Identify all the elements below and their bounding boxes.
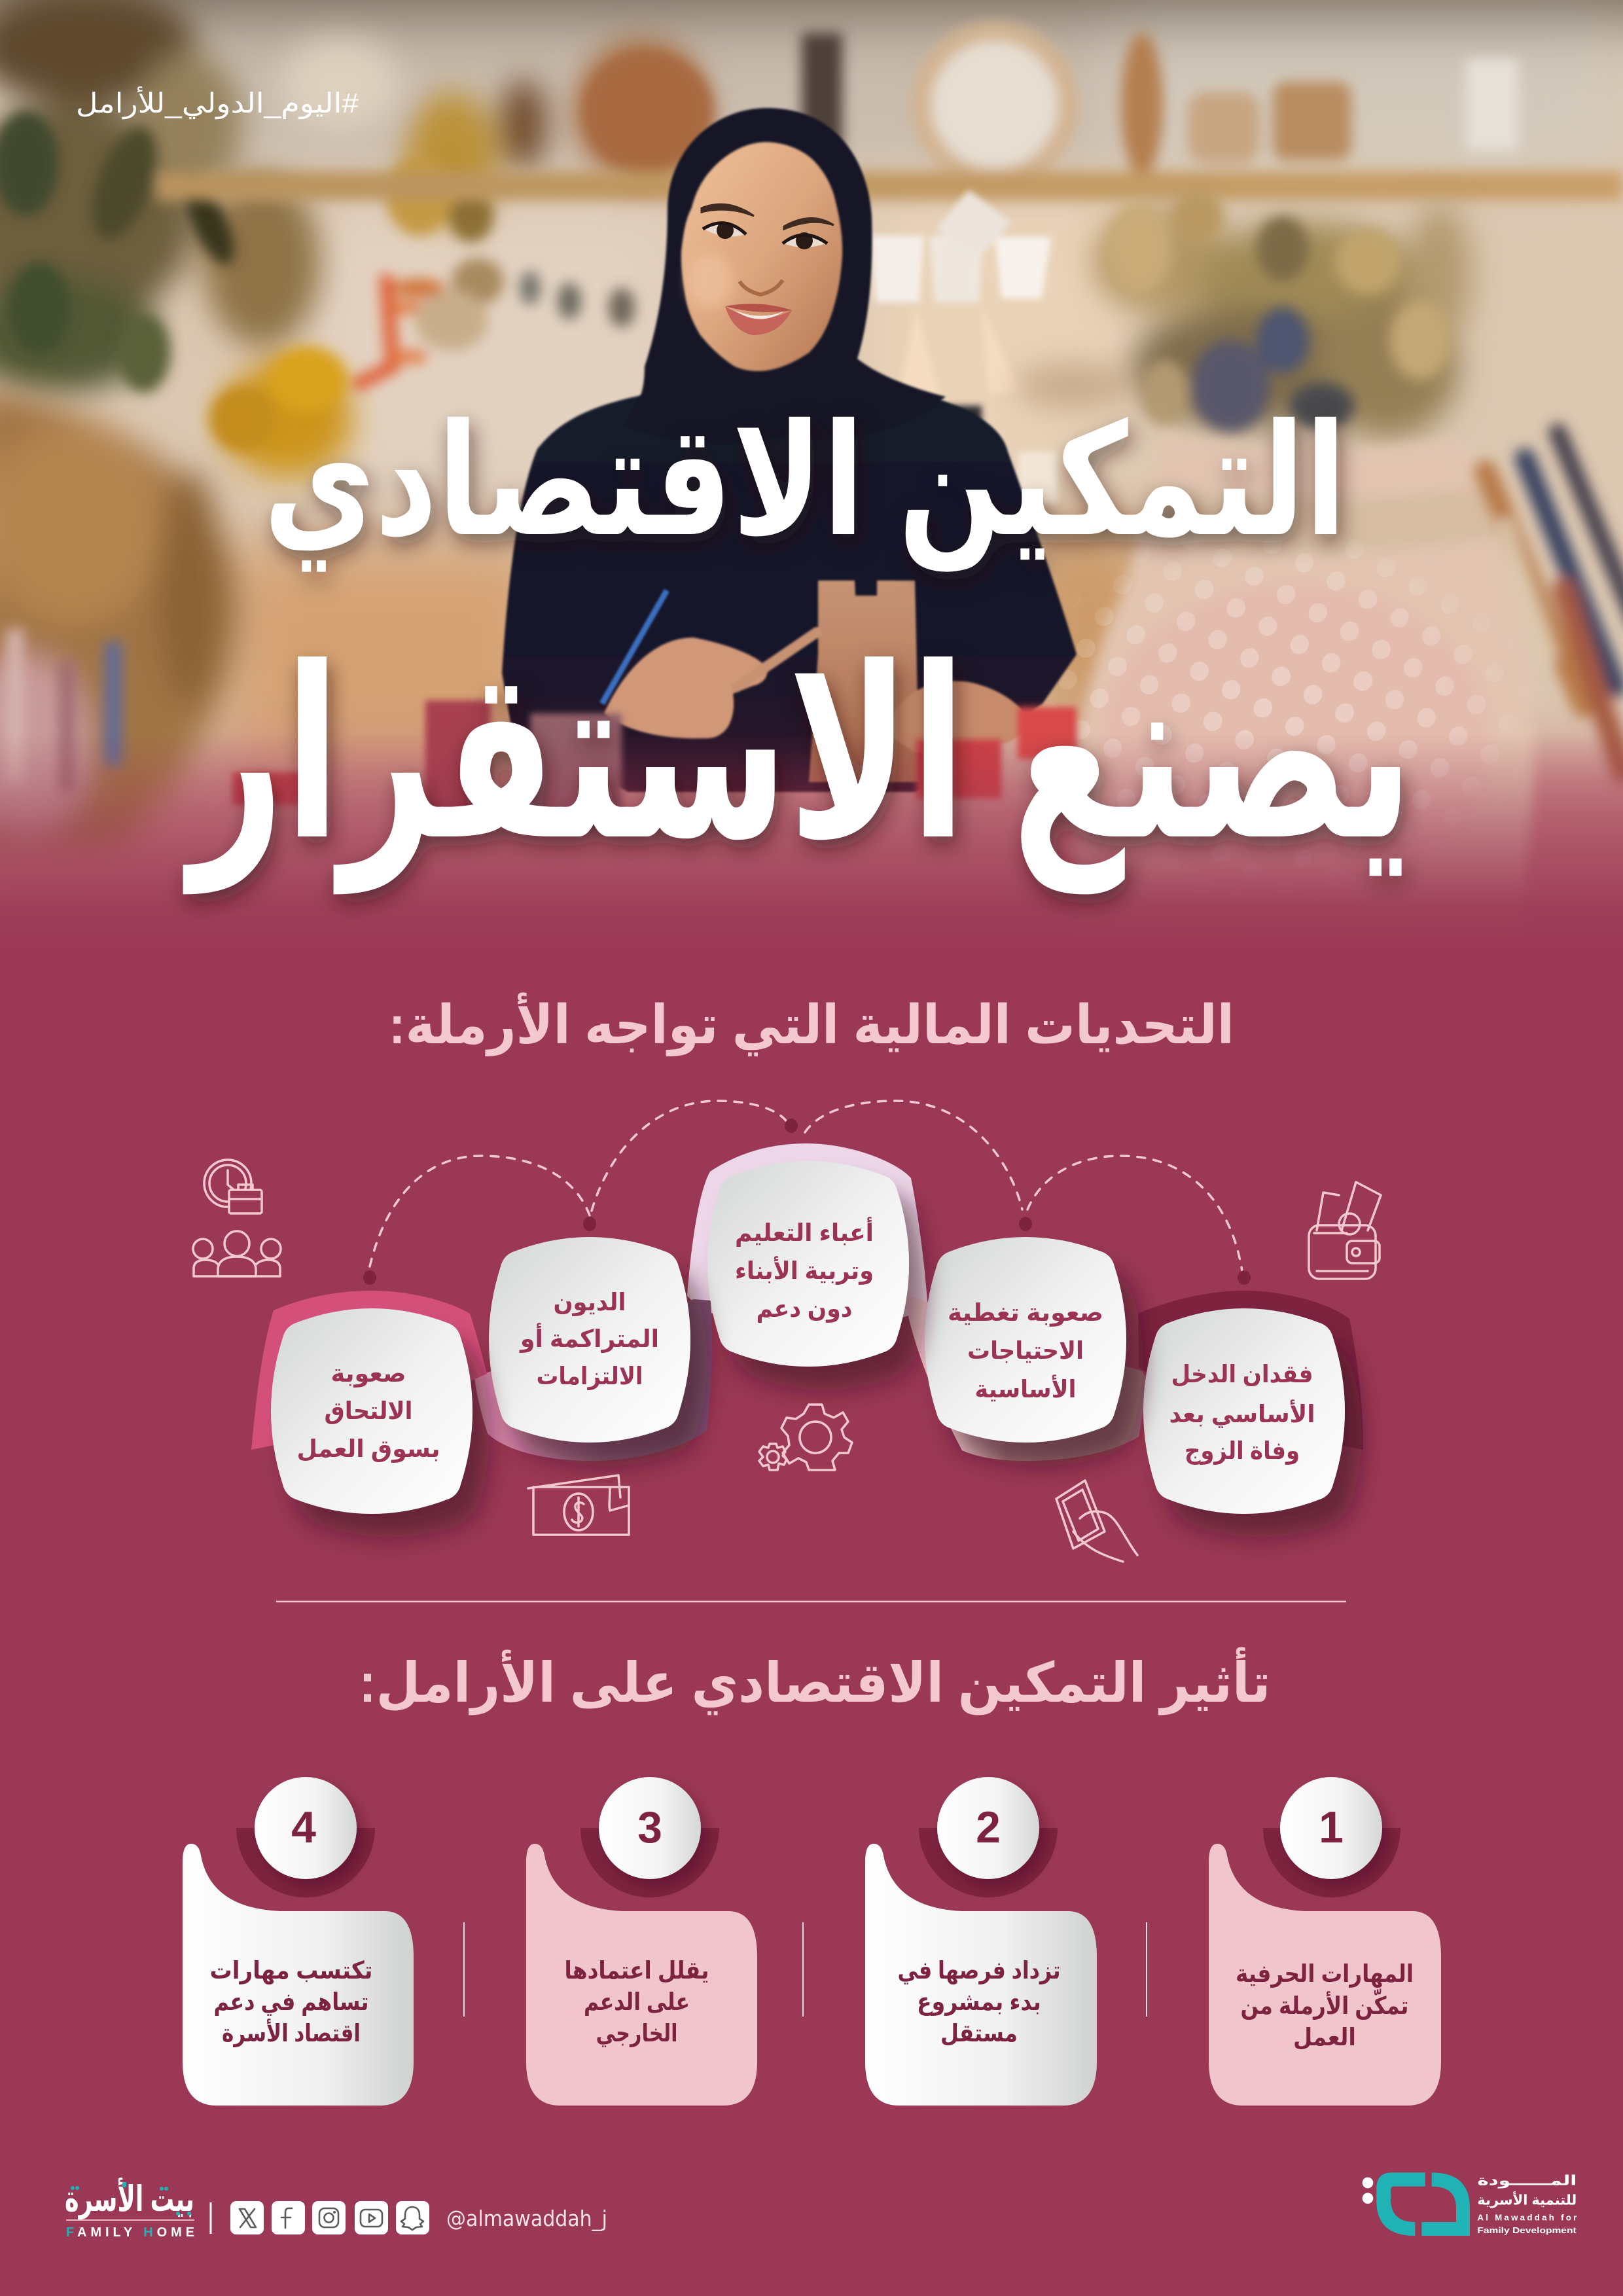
- impact card 1: [1209, 1777, 1441, 2106]
- ceramic vase right with halftone: [1074, 432, 1534, 949]
- challenges flow: [251, 1101, 1363, 1514]
- impact card 1: المهارات الحرفية: [1236, 1960, 1414, 1988]
- impact card 2: [865, 1777, 1097, 2106]
- logo wordmark: للتنمية الأسرية: [1477, 2191, 1577, 2208]
- abaya: [502, 393, 1077, 792]
- heading: impact of economic empowerment: تأثير التمكين الاقتصادي على الأرامل:: [359, 1647, 1271, 1715]
- card body 3: [526, 1844, 757, 2106]
- card: basic income loss: الأساسي بعد: [1169, 1399, 1315, 1428]
- card body 1: [1209, 1844, 1441, 2106]
- card: basic income loss: وفاة الزوج: [1185, 1437, 1300, 1465]
- woman: [232, 108, 1077, 831]
- impact card 4: تساهم في دعم: [213, 1988, 369, 2016]
- logo: al mawaddah: [1363, 2172, 1577, 2236]
- logo wordmark: Family Development: [1477, 2225, 1577, 2235]
- logo wordmark: Al Mawaddah for: [1477, 2212, 1577, 2222]
- foreground vase left: [0, 386, 240, 851]
- logo wordmark: [1477, 2173, 1577, 2235]
- card: basic needs: صعوبة تغطية: [948, 1299, 1103, 1327]
- number badge 4: 4: [291, 1803, 316, 1852]
- hands, tower and brush: [602, 581, 1034, 782]
- card: job market access: صعوبة: [331, 1360, 406, 1388]
- impact card 1: العمل: [1293, 2024, 1356, 2051]
- impact card 2: تزداد فرصها في: [898, 1957, 1060, 1984]
- impact card 2: مستقل: [940, 2020, 1018, 2047]
- icon: banknote envelope: [528, 1475, 629, 1535]
- card: basic income loss: [1143, 1308, 1345, 1514]
- number badge 4: [236, 1777, 375, 1897]
- impact card 4: [183, 1777, 414, 2106]
- card: job market access: [271, 1308, 473, 1514]
- number badge 1: 1: [1319, 1803, 1344, 1852]
- card: job market access: الالتحاق: [325, 1397, 412, 1424]
- social icon: facebook: [272, 2201, 305, 2234]
- blurred studio backdrop: [0, 0, 1623, 982]
- social icon: youtube: [355, 2201, 388, 2234]
- fade into maroon: [0, 733, 1623, 949]
- card: education burden: دون دعم: [757, 1295, 852, 1323]
- number badge 1: [1263, 1777, 1400, 1897]
- plants left: [0, 0, 707, 478]
- hijab: [625, 108, 946, 443]
- hashtag: #اليوم_الدولي_للأرامل: [76, 86, 359, 120]
- connector dots: [363, 1119, 1251, 1285]
- social icon: snapchat: [396, 2201, 429, 2234]
- card: basic needs: الاحتياجات: [967, 1337, 1084, 1364]
- social icon: x: [230, 2201, 264, 2234]
- impact card 3: يقلل اعتمادها: [564, 1957, 709, 1984]
- logo: family home: [65, 2178, 194, 2240]
- card: education burden: أعباء التعليم: [735, 1217, 874, 1247]
- logo wordmark: المــــــودة: [1477, 2173, 1577, 2189]
- logo: family home: بيت الأسرة: [65, 2178, 194, 2219]
- card body 2: [865, 1844, 1097, 2106]
- face: [681, 142, 842, 371]
- heading: financial challenges: التحديات المالية التي تواجه الأرملة:: [389, 992, 1234, 1056]
- plants right: [1014, 203, 1472, 439]
- paint jars: [232, 700, 1077, 831]
- wall decor and shelf: [157, 31, 1623, 200]
- main title: [182, 395, 1414, 895]
- ribbon behind cards: [251, 1143, 1363, 1461]
- logo mark: [1363, 2172, 1470, 2236]
- card: basic needs: [925, 1237, 1126, 1443]
- social handle: @almawaddah_j: [446, 2206, 607, 2231]
- icon: wallet with banknotes: [1309, 1182, 1381, 1279]
- impact card 1: تمكّن الأرملة من: [1241, 1989, 1408, 2020]
- icon: gears: [759, 1405, 852, 1470]
- card: basic needs: الأساسية: [975, 1374, 1076, 1403]
- dashed connector arcs: [370, 1101, 1242, 1271]
- number badge 2: 2: [976, 1803, 1001, 1852]
- card body 4: [183, 1844, 414, 2106]
- hero photo: artisan woman in a craft studio: [0, 0, 1623, 988]
- impact card 2: بدء بمشروع: [917, 1988, 1041, 2016]
- divider: [276, 1601, 1346, 1602]
- card: job market access: بسوق العمل: [297, 1435, 440, 1463]
- brushes right: [1486, 432, 1623, 772]
- card: accumulated debts: [489, 1237, 690, 1443]
- logo: family home: F AMILY H OME: [66, 2225, 194, 2240]
- impact card 3: [526, 1777, 757, 2106]
- social icon: instagram: [312, 2201, 346, 2234]
- impact card 4: تكتسب مهارات: [209, 1957, 373, 1984]
- impact card 3: على الدعم: [584, 1988, 690, 2016]
- icon: clock, briefcase and people: [193, 1160, 281, 1276]
- number badge 2: [919, 1777, 1058, 1897]
- number badge 3: 3: [637, 1803, 662, 1852]
- card: accumulated debts: المتراكمة أو: [519, 1323, 659, 1353]
- icon: hand holding money: [1056, 1480, 1137, 1562]
- card: accumulated debts: الديون: [554, 1289, 626, 1316]
- card: accumulated debts: الالتزامات: [537, 1363, 643, 1390]
- card: education burden: وتربية الأبناء: [735, 1255, 874, 1285]
- pots under the shelf: [870, 190, 1057, 504]
- card: basic income loss: فقدان الدخل: [1171, 1361, 1313, 1388]
- leaves and hanging crafts: [0, 111, 635, 452]
- title line one: التمكين الاقتصادي: [263, 395, 1347, 572]
- impact card 4: اقتصاد الأسرة: [222, 2018, 361, 2047]
- card: education burden: [707, 1161, 909, 1367]
- impact card 3: الخارجي: [596, 2020, 678, 2047]
- number badge 3: [580, 1777, 719, 1897]
